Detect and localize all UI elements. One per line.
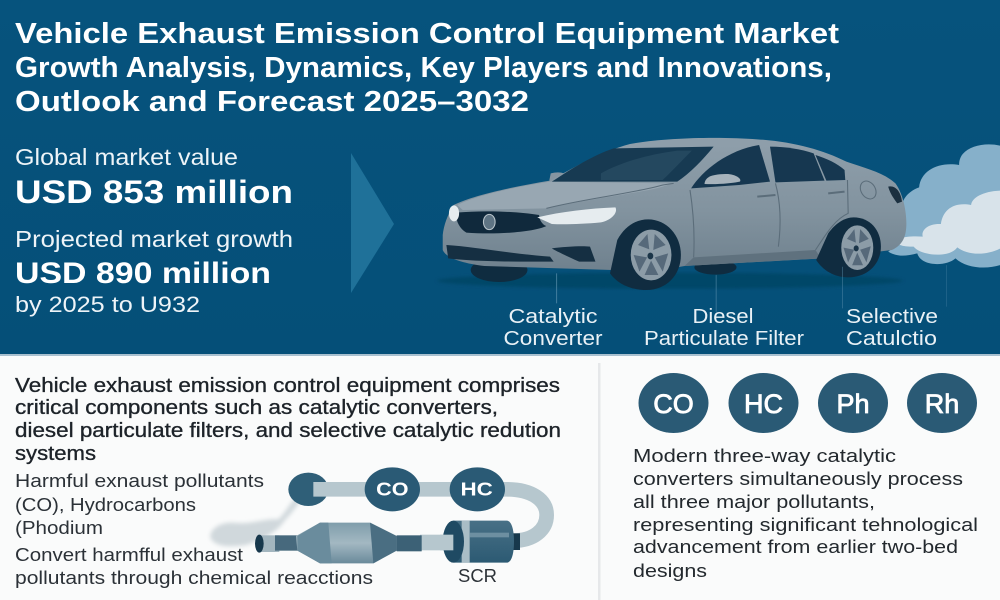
icon: SCR unit (440, 521, 520, 563)
panel: header band (0, 0, 1000, 356)
labels: car components: Catalytic (508, 305, 598, 328)
labels: car components: Particulate Filter (644, 327, 804, 350)
icon: smoke (210, 493, 304, 546)
labels: car components: Diesel (692, 305, 754, 328)
text block: three-way converters: Modern three-way catalytic (633, 445, 896, 466)
badge: Rh (907, 373, 977, 433)
icon: door lines and handles (546, 179, 879, 257)
icon: rear wheel (816, 217, 881, 277)
icon: front wheel (610, 219, 681, 290)
badge: CO: CO (653, 389, 694, 419)
labels: car components: Converter (504, 327, 603, 350)
icon: far wheels and underside (471, 258, 737, 282)
diagram: exhaust system (210, 467, 547, 563)
badge: HC: HC (744, 389, 783, 419)
icon: sill (685, 250, 821, 266)
badge: CO (638, 373, 708, 433)
badge: Ph: Ph (836, 389, 870, 419)
stats: market value: USD 890 million (15, 257, 271, 290)
icon: far mirror (549, 172, 564, 181)
text block: three-way converters: representing significant tehnological (633, 514, 978, 535)
icon: grille (456, 211, 546, 233)
icon: badge (483, 214, 495, 230)
text block: equipment summary: critical components such as catalytic converters, (15, 397, 498, 419)
text block: pollutants: pollutants through chemical reacctions (15, 568, 373, 588)
badge: Rh: Rh (925, 389, 959, 419)
title: Growth Analysis, Dynamics, Key Players and Innovations, (15, 52, 832, 84)
icon: tail light (888, 186, 902, 203)
stats: market value: Global market value (15, 144, 238, 170)
title: Vehicle Exhaust Emission Control Equipment Market (15, 18, 840, 50)
icon: windshield (552, 147, 714, 182)
labels: car components (504, 305, 938, 350)
text block: three-way converters: advancement from earlier two-bed (633, 536, 958, 557)
badge: HC (450, 467, 505, 511)
icon: headlights (449, 205, 616, 224)
text block: equipment summary: systems (15, 443, 96, 465)
icon: connecting pipe (420, 535, 455, 550)
stats: market value: by 2025 to U932 (15, 292, 200, 317)
labels: car components: Selective (846, 305, 938, 328)
icon: side windows (691, 145, 845, 188)
text block: three-way converters: all three major pollutants, (633, 491, 875, 512)
text block: pollutants: (Phodium (15, 518, 103, 538)
panel: lower white section (0, 356, 1000, 600)
text block: pollutants: Harmful exnaust pollutants (15, 471, 264, 491)
arrow (351, 153, 394, 293)
icon: lower intake (446, 245, 595, 262)
badge: CO: CO (376, 478, 408, 499)
label: SCR: SCR (458, 566, 497, 586)
text block: equipment summary: diesel particulate filters, and selective catalytic redution (15, 420, 561, 442)
leader lines (557, 265, 946, 312)
text block: pollutants: Convert harmfful exhaust (15, 545, 243, 565)
text block: three-way converters (633, 445, 978, 581)
text block: pollutants (15, 471, 373, 588)
stats: market value: Projected market growth (15, 226, 293, 252)
icon: hood highlight (457, 182, 670, 210)
text block: three-way converters: designs (633, 560, 707, 581)
icon: inlet circle (288, 473, 328, 506)
badge: CO (365, 467, 420, 511)
badge: HC (728, 373, 798, 433)
text block: pollutants: (CO), Hydrocarbons (15, 495, 196, 515)
illustration: car with exhaust cloud (437, 138, 1000, 312)
labels: car components: Catulctio (846, 327, 937, 350)
badge: HC: HC (460, 478, 493, 499)
text block: three-way converters: converters simultaneously process (633, 468, 963, 489)
divider (598, 363, 600, 600)
text block: equipment summary (15, 375, 561, 465)
title (15, 18, 840, 118)
stats: market value (15, 144, 293, 317)
title: Outlook and Forecast 2025–3032 (15, 86, 529, 118)
icon: mirror (705, 174, 740, 184)
panel: pollutant badges (638, 373, 977, 433)
icon: exhaust cloud (888, 144, 1000, 268)
icon: catalytic converter (255, 523, 422, 563)
icon: car body (443, 138, 906, 271)
icon: pipe loop (313, 489, 547, 541)
stats: market value: USD 853 million (15, 174, 293, 210)
text block: equipment summary: Vehicle exhaust emission control equipment comprises (15, 375, 560, 397)
badge: Ph (818, 373, 888, 433)
